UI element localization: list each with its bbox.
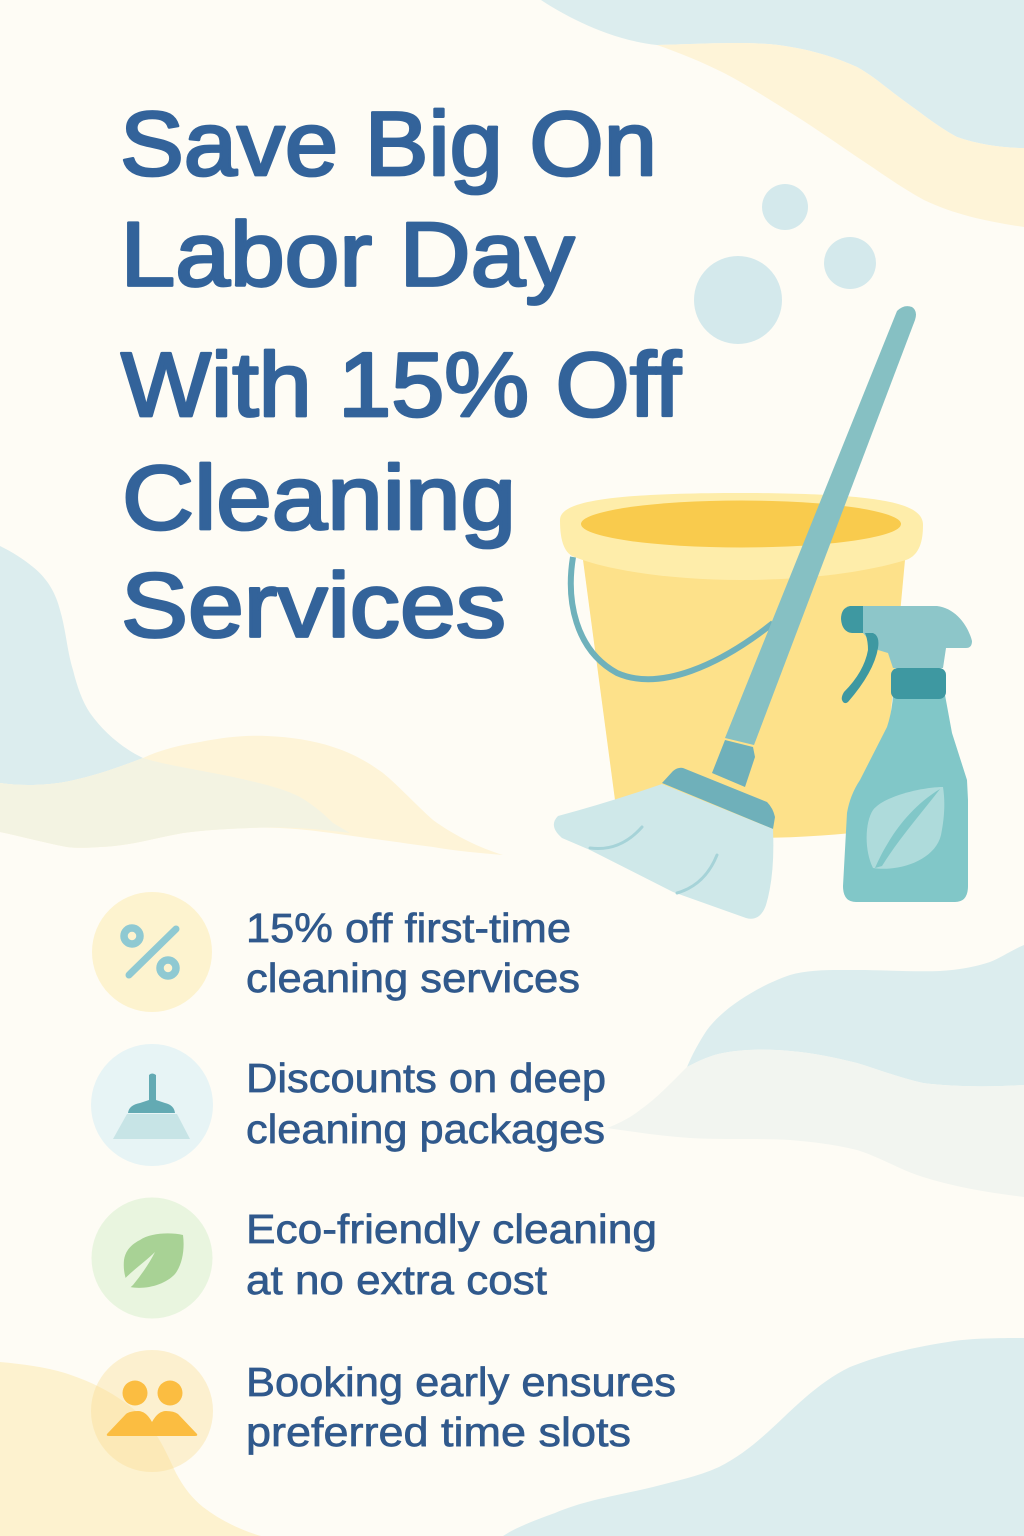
text: first-time discount: cleaning services: [246, 955, 580, 1001]
item: first-time discount: [92, 892, 580, 1012]
text: eco-friendly cleaning: at no extra cost: [246, 1257, 548, 1303]
text: first-time discount: [246, 905, 580, 1001]
title: Save Big On: [120, 94, 657, 195]
text: eco-friendly cleaning: Eco-friendly cleaning: [246, 1206, 657, 1252]
text: eco-friendly cleaning: [246, 1206, 657, 1303]
item: deep cleaning discount: [91, 1044, 606, 1166]
title: Labor Day: [120, 204, 575, 306]
title: Cleaning: [122, 448, 516, 549]
text: early booking: preferred time slots: [246, 1409, 631, 1455]
text: early booking: [246, 1359, 676, 1455]
icon: percent: [92, 892, 212, 1012]
icon: leaf: [92, 1198, 212, 1318]
illustration: bucket: [560, 493, 923, 838]
icon: people: [91, 1350, 213, 1472]
item: eco-friendly cleaning: [92, 1198, 657, 1318]
text: deep cleaning discount: [246, 1055, 606, 1152]
title: With 15% Off: [121, 335, 682, 436]
text: early booking: Booking early ensures: [246, 1359, 676, 1405]
text: first-time discount: 15% off first-time: [246, 905, 571, 951]
title: [120, 94, 682, 656]
illustration: mop: [554, 306, 916, 919]
text: deep cleaning discount: cleaning packages: [246, 1106, 605, 1152]
icon: broom: [91, 1044, 213, 1166]
illustration: spray bottle: [841, 606, 972, 902]
title: Services: [121, 556, 506, 656]
text: deep cleaning discount: Discounts on deep: [246, 1055, 606, 1101]
item: early booking: [91, 1350, 676, 1472]
icon: soap bubbles: [694, 184, 876, 344]
